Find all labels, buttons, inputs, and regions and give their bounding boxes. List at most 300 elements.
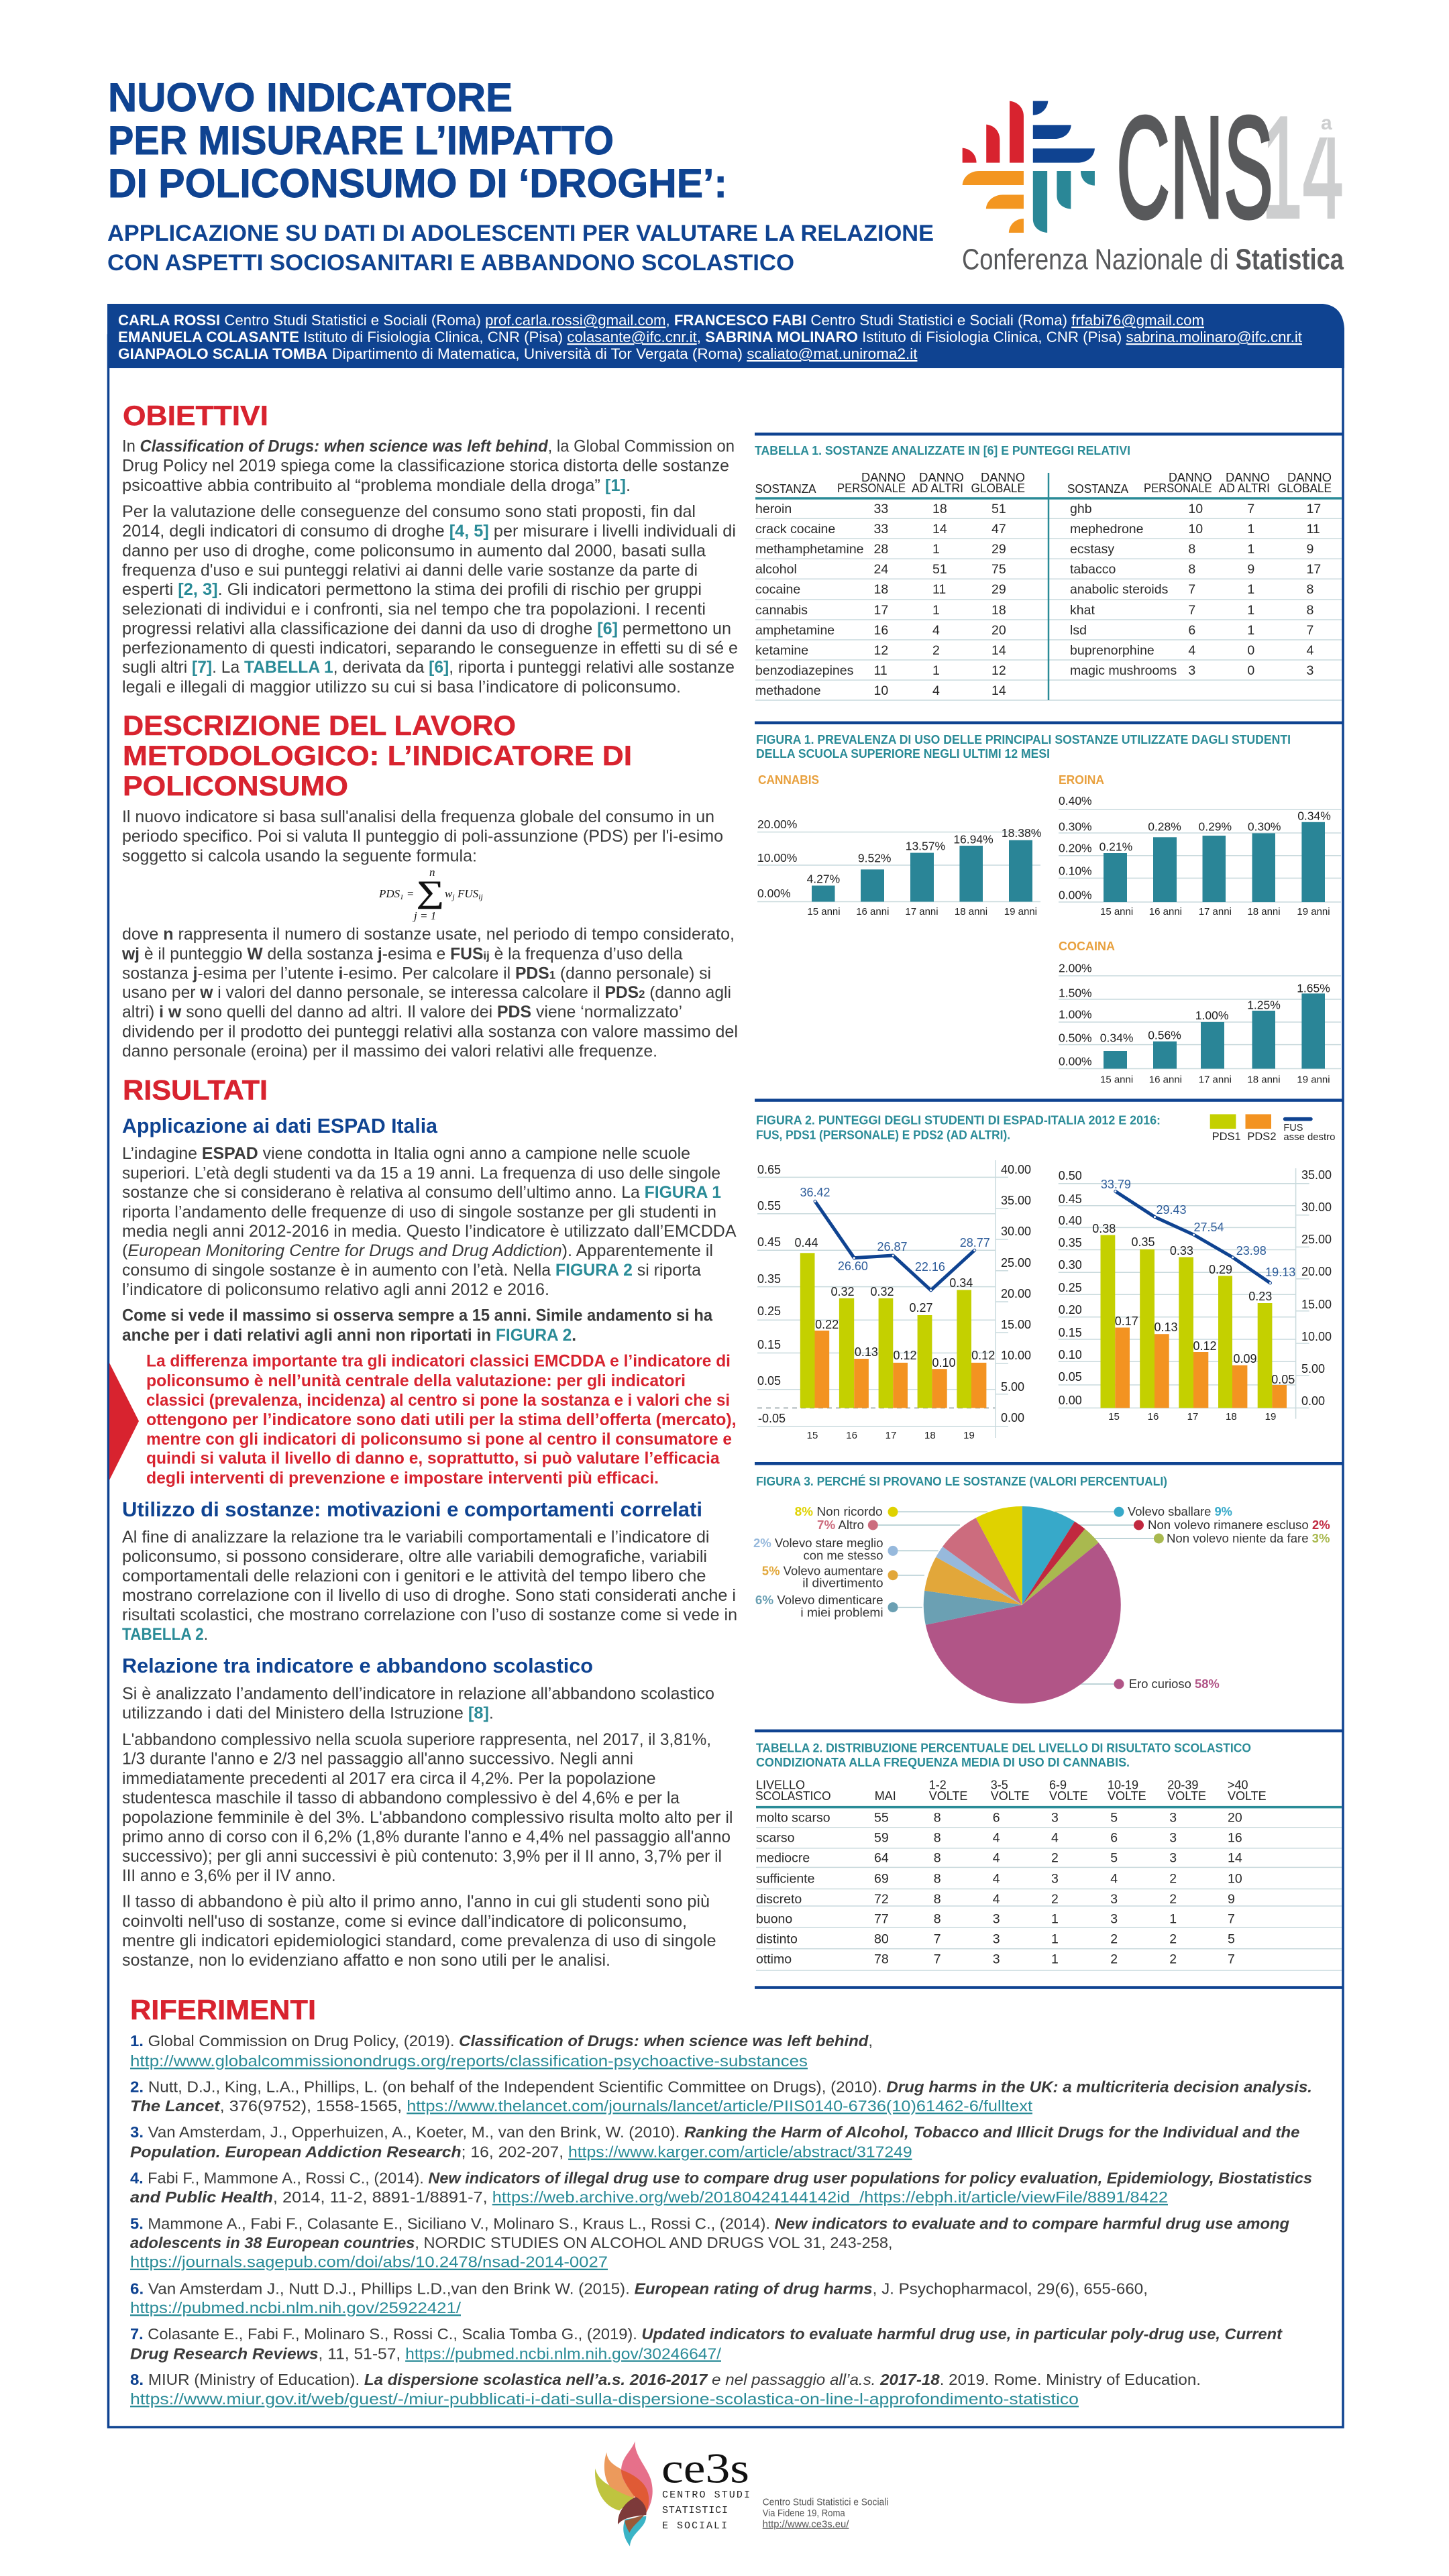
combo chart: 2016: 0.00 <box>1059 1394 1082 1407</box>
table: sostanze e punteggi: 11 <box>873 663 888 678</box>
reference list: Drug Research Reviews , 11, 51-57, https://pubmed.ncbi.nlm.nih.gov/30246647/ <box>130 2345 721 2362</box>
table: risultato scolastico: 6 <box>993 1810 1000 1825</box>
table: risultato scolastico: 3 <box>993 1931 1000 1946</box>
table: risultato scolastico: 1 <box>1051 1911 1059 1926</box>
table: risultato scolastico: 2 <box>1169 1892 1177 1907</box>
table: sostanze e punteggi: 12 <box>991 663 1006 678</box>
table: sostanze e punteggi: cocaine <box>755 582 800 597</box>
heading: tabella 2: CONDIZIONATA ALLA FREQUENZA MEDIA DI USO DI CANNABIS. <box>756 1755 1130 1769</box>
reference list: https://journals.sagepub.com/doi/abs/10.2478/nsad-2014-0027 <box>130 2253 608 2271</box>
text block: obiettivi: selezionati di individui e i confronti, sia nel tempo che tra popolazioni. I recenti <box>122 600 706 618</box>
combo chart: 2012: 0.45 <box>757 1235 781 1249</box>
table: sostanze e punteggi: 20 <box>991 623 1006 638</box>
table: sostanze e punteggi: DANNO <box>981 471 1025 484</box>
combo chart: 2016: 19 <box>1265 1411 1276 1422</box>
table: sostanze e punteggi: 29 <box>991 582 1006 597</box>
table: sostanze e punteggi: 24 <box>873 562 888 577</box>
arrow: red callout marker <box>109 1363 139 1480</box>
table: sostanze e punteggi: heroin <box>755 502 792 516</box>
bar chart: eroina: 0.29% <box>1198 820 1232 833</box>
bar chart: cocaina: 16 anni <box>1149 1074 1182 1086</box>
bar chart: eroina: 0.20% <box>1059 841 1092 854</box>
table: sostanze e punteggi: 29 <box>991 542 1006 557</box>
pie labels: 7% Altro <box>817 1518 864 1532</box>
combo chart: 2016: 0.13 <box>1154 1321 1178 1334</box>
bar chart: cocaina: 1.65% <box>1297 982 1330 995</box>
bar chart: eroina <box>1059 773 1341 917</box>
combo chart: 2016: 0.00 <box>1301 1394 1325 1408</box>
heading: figura 1: FIGURA 1. PREVALENZA DI USO DELLE PRINCIPALI SOSTANZE UTILIZZATE DAGLI STUDENTI <box>756 732 1291 746</box>
text block: obiettivi: In Classification of Drugs: when science was left behind, la Global Commission on <box>122 437 735 456</box>
reference list: 4. Fabi F., Mammone A., Rossi C., (2014). New indicators of illegal drug use to compare drug user populations for policy evaluation, Epidemiology, Biostatistics <box>130 2169 1312 2186</box>
table: sostanze e punteggi: 2 <box>932 643 940 658</box>
table: risultato scolastico: 14 <box>1228 1851 1242 1866</box>
formula: j <box>451 892 455 901</box>
table: risultato scolastico: 6-9 <box>1049 1779 1067 1792</box>
bar chart: cocaina: 0.56% <box>1148 1029 1181 1042</box>
bar chart: cannabis: 19 anni <box>1004 906 1037 917</box>
text block: abbandono scolastico: utilizzando i dati del Ministero della Istruzione [8]. <box>122 1704 494 1723</box>
combo chart: 2012: 0.32 <box>870 1285 894 1298</box>
table: risultato scolastico: 69 <box>874 1872 889 1887</box>
reference list: https://pubmed.ncbi.nlm.nih.gov/25922421/ <box>130 2299 462 2316</box>
table: risultato scolastico: 78 <box>874 1952 889 1967</box>
pie labels: Non volevo rimanere escluso 2% <box>1148 1518 1330 1532</box>
text block: metodo intro: Il nuovo indicatore si basa sull'analisi della frequenza globale del consumo in un <box>122 807 714 826</box>
table: risultato scolastico: 3 <box>1169 1831 1177 1846</box>
table: sostanze e punteggi: DANNO <box>1169 471 1212 484</box>
text block: abbandono scolastico: successivo); per gli anni successivi è più contenuto: 3,9% per il II anno, 3,7% per il <box>122 1847 722 1866</box>
text block: metodo spiegazione: usano per w i valori del danno personale, se interessa calcolare il PDS2 (danno agli <box>122 983 731 1002</box>
table: sostanze e punteggi: buprenorphine <box>1070 643 1155 658</box>
combo chart: 2016: 35.00 <box>1301 1168 1332 1182</box>
bar chart: eroina: 0.34% <box>1297 809 1331 822</box>
table: sostanze e punteggi: anabolic steroids <box>1070 582 1169 597</box>
heading: tabella 1: TABELLA 1. SOSTANZE ANALIZZATE IN [6] E PUNTEGGI RELATIVI <box>755 443 1130 457</box>
table: sostanze e punteggi: 6 <box>1188 623 1195 638</box>
table: sostanze e punteggi: 11 <box>932 582 946 597</box>
table: risultato scolastico: 8 <box>934 1851 941 1866</box>
heading: descrizione <box>123 710 632 801</box>
heading: figura 1 <box>756 732 1291 761</box>
combo chart: 2012: 35.00 <box>1001 1194 1031 1207</box>
table: sostanze e punteggi: 28 <box>873 542 888 557</box>
panel: figura 1 <box>755 722 1343 1086</box>
table: sostanze e punteggi: 1 <box>1247 603 1254 618</box>
table: risultato scolastico: VOLTE <box>991 1789 1029 1803</box>
logo: CNS 14 Conferenza Nazionale di Statistica: CNS <box>1116 86 1273 248</box>
table: sostanze e punteggi: 1 <box>1247 522 1254 537</box>
reference list <box>130 2032 1312 2408</box>
text block: abbandono scolastico: L'abbandono complessivo nella scuola superiore rappresenta, nel 2017, il 3,81%, <box>122 1730 711 1749</box>
bar chart: cocaina: 0.50% <box>1059 1031 1092 1045</box>
text block: abbandono scolastico: 1/3 durante l'anno e 2/3 nel passaggio all'anno successivo. Negli anni <box>122 1750 633 1769</box>
reference list: adolescents in 38 European countries, NORDIC STUDIES ON ALCOHOL AND DRUGS VOL 31, 243-258, <box>130 2234 892 2251</box>
combo chart: 2016: 15 <box>1108 1411 1120 1422</box>
logo: CNS 14 Conferenza Nazionale di Statistica <box>962 86 1346 276</box>
combo chart: 2012: 22.16 <box>915 1260 945 1274</box>
combo chart: 2016: 0.50 <box>1059 1169 1082 1182</box>
table: sostanze e punteggi: 9 <box>1307 542 1313 557</box>
combo chart: 2012: 36.42 <box>800 1186 830 1199</box>
text block: utilizzo <box>122 1528 737 1644</box>
bar chart: eroina: EROINA <box>1059 773 1104 787</box>
text block: ce3s address: Via Fidene 19, Roma <box>763 2508 846 2519</box>
table: risultato scolastico: 2 <box>1110 1952 1118 1967</box>
panel: obiettivi <box>122 400 738 696</box>
pie labels: 5% Volevo aumentare <box>762 1565 883 1578</box>
text block: utilizzo: risultati scolastici, che mostrano correlazione con l’uso di sostanze come si vede in <box>122 1606 737 1624</box>
combo chart: 2016: 0.05 <box>1059 1370 1082 1384</box>
heading: descrizione: DESCRIZIONE DEL LAVORO <box>123 710 516 741</box>
bar chart: cannabis: CANNABIS <box>758 773 819 787</box>
table: sostanze e punteggi: PERSONALE <box>837 482 906 495</box>
bar chart: eroina: 18 anni <box>1247 906 1281 917</box>
table: risultato scolastico: 59 <box>874 1831 889 1846</box>
bar chart: cocaina: 15 anni <box>1100 1074 1133 1086</box>
table: risultato scolastico: 4 <box>1051 1831 1059 1846</box>
bar chart: eroina: 0.30% <box>1059 820 1092 833</box>
text block: abbandono scolastico: popolazione femminile è del 3%. L'abbandono complessivo risulta molto alto per il <box>122 1808 733 1827</box>
bar chart: eroina: 0.00% <box>1059 888 1092 901</box>
table: sostanze e punteggi: methamphetamine <box>755 542 864 557</box>
heading: figura 2 <box>756 1113 1161 1141</box>
table: sostanze e punteggi: 4 <box>1307 643 1313 658</box>
author band: EMANUELA COLASANTE Istituto di Fisiologia Clinica, CNR (Pisa) colasante@ifc.cnr.it, SABRINA MOLINARO Istituto di Fisiologia Clinica, CNR (Pisa) sabrina.molinaro@ifc.cnr.it <box>118 329 1302 345</box>
combo chart: 2012: 0.34 <box>949 1276 973 1290</box>
table: risultato scolastico: 1 <box>1051 1952 1059 1967</box>
table: sostanze e punteggi: 8 <box>1307 582 1313 597</box>
table: risultato scolastico: 1 <box>1051 1931 1059 1946</box>
combo chart: 2012: 0.27 <box>909 1301 933 1314</box>
table: sostanze e punteggi: 1 <box>1247 542 1254 557</box>
callout: differenza tra indicatori: classici (prevalenza, incidenza) al centro si pone la sostanza e i valori che si <box>146 1391 730 1410</box>
text block: obiettivi: frequenza d'uso e sui punteggi relativi ai danni delle varie sostanze da parte di <box>122 561 698 580</box>
table: sostanze e punteggi: 8 <box>1188 542 1195 557</box>
bar chart: cocaina: COCAINA <box>1059 939 1115 953</box>
reference list: 5. Mammone A., Fabi F., Colasante E., Siciliano V., Molinaro S., Kraus L., Rossi C., (2014). New indicators to evaluate and to compare harmful drug use among <box>130 2215 1289 2232</box>
reference list: https://www.miur.gov.it/web/guest/-/miur-pubblicati-i-dati-sulla-dispersione-scolastica-on-line-l-approfondimento-statistico <box>130 2390 1079 2408</box>
table: sostanze e punteggi: DANNO <box>919 471 964 484</box>
combo chart: 2016: 0.15 <box>1059 1326 1082 1339</box>
table: risultato scolastico: VOLTE <box>1228 1789 1267 1803</box>
table: risultato scolastico: 5 <box>1228 1931 1235 1946</box>
text block: abbandono scolastico: sostanze, non lo evidenziano affatto e non sono utili per le analisi. <box>122 1951 610 1970</box>
combo chart: 2016: 0.25 <box>1059 1281 1082 1294</box>
text block: abbandono scolastico: Il tasso di abbandono è più alto il primo anno, l'anno in cui gli studenti sono più <box>122 1893 710 1911</box>
formula: 1 <box>400 893 404 901</box>
combo chart: 2016: 0.09 <box>1233 1352 1257 1365</box>
title <box>108 75 727 206</box>
table: sostanze e punteggi: 12 <box>873 643 888 658</box>
pie chart <box>924 1506 1121 1703</box>
logo: CNS 14 Conferenza Nazionale di Statistica: Conferenza Nazionale di Statistica <box>962 243 1344 276</box>
text block: utilizzo: Al fine di analizzare la relazione tra le variabili comportamentali e l’indicatore di <box>122 1528 710 1547</box>
text block: abbandono scolastico: primo anno di corso con il 6,2% (1,8% durante l'anno e 4,4% nel passaggio all'anno <box>122 1828 731 1846</box>
table: risultato scolastico: distinto <box>756 1931 798 1946</box>
table: sostanze e punteggi: DANNO <box>1226 471 1270 484</box>
text block: obiettivi: 2014, degli indicatori di consumo di droghe [4, 5] per misurare i livelli individuali di <box>122 522 736 541</box>
text block: obiettivi: perfezionamento di questi indicatori, separando le conseguenze in effetti su di sé e <box>122 639 738 658</box>
bar chart: eroina: 16 anni <box>1149 906 1182 917</box>
table: risultato scolastico: 20-39 <box>1167 1779 1198 1792</box>
text block: metodo spiegazione: dividendo per il prodotto dei punteggi relativi alla sostanza con valore massimo del <box>122 1022 738 1041</box>
table: sostanze e punteggi: SOSTANZA <box>1067 482 1128 496</box>
text block: abbandono scolastico: studentesca maschile il tasso di abbandono complessivo è del 4,6% e per la <box>122 1789 680 1807</box>
bar chart: cannabis: 15 anni <box>807 906 841 917</box>
text block: metodo spiegazione: dove n rappresenta il numero di sostanze usate, nel periodo di tempo considerato, <box>122 925 735 944</box>
heading: figura 2: FUS, PDS1 (PERSONALE) E PDS2 (AD ALTRI). <box>756 1128 1010 1141</box>
pie labels: Ero curioso 58% <box>1129 1677 1220 1691</box>
combo chart: 2012: 0.65 <box>757 1163 781 1176</box>
text block: obiettivi: danno per uso di droghe, come policonsumo in aumento dal 2000, basati sulla <box>122 541 706 560</box>
table: sostanze e punteggi: methadone <box>755 683 821 698</box>
table: sostanze e punteggi: 18 <box>932 502 947 516</box>
formula: ij <box>478 892 483 901</box>
combo chart: 2012: 18 <box>924 1430 936 1441</box>
table: risultato scolastico: scarso <box>756 1831 795 1846</box>
table: risultato scolastico: 8 <box>934 1911 941 1926</box>
author band: CARLA ROSSI Centro Studi Statistici e Sociali (Roma) prof.carla.rossi@gmail.com, FRANCESCO FABI Centro Studi Statistici e Sociali (Roma) frfabi76@gmail.com <box>118 312 1204 329</box>
table: sostanze e punteggi: tabacco <box>1070 562 1116 577</box>
table: risultato scolastico: molto scarso <box>756 1810 830 1825</box>
combo chart: 2016: 0.38 <box>1092 1222 1116 1235</box>
table: sostanze e punteggi: 4 <box>1188 643 1195 658</box>
text block: abbandono scolastico: III anno e 3,6% per il IV anno. <box>122 1866 336 1885</box>
table: risultato scolastico: 3 <box>1051 1872 1059 1887</box>
subheading: relazione: Relazione tra indicatore e abbandono scolastico <box>122 1654 593 1677</box>
author band: GIANPAOLO SCALIA TOMBA Dipartimento di Matematica, Università di Tor Vergata (Roma) scaliato@mat.uniroma2.it <box>118 345 917 362</box>
table: sostanze e punteggi: 9 <box>1247 562 1254 577</box>
combo chart: 2016: 0.20 <box>1059 1303 1082 1317</box>
pie labels: 6% Volevo dimenticare <box>755 1593 883 1607</box>
text block: obiettivi: psicoattive abbia contribuito al “problema mondiale della droga” [1]. <box>122 476 631 495</box>
table: risultato scolastico: 2 <box>1051 1892 1059 1907</box>
text block: espad: (European Monitoring Centre for Drugs and Drug Addiction). Apparentemente il <box>122 1241 713 1260</box>
reference list: 1. Global Commission on Drug Policy, (2019). Classification of Drugs: when science was left behind , <box>130 2032 873 2050</box>
text block: abbandono scolastico: Si è analizzato l’andamento dell’indicatore in relazione all’abbandono scolastico <box>122 1685 714 1703</box>
table: risultato scolastico: 64 <box>874 1851 889 1866</box>
combo chart: 2012: 0.10 <box>932 1356 956 1369</box>
combo chart: 2012: 16 <box>846 1430 857 1441</box>
bar chart: eroina: 17 anni <box>1199 906 1232 917</box>
table: risultato scolastico: 7 <box>1228 1952 1235 1967</box>
table: sostanze e punteggi: 8 <box>1188 562 1195 577</box>
table: sostanze e punteggi: 17 <box>1307 562 1321 577</box>
heading: risultati: RISULTATI <box>123 1074 268 1105</box>
combo chart: 2016: 20.00 <box>1301 1265 1332 1278</box>
combo chart: 2016: 0.29 <box>1209 1263 1232 1276</box>
text block: metodo spiegazione: danno personale (eroina) per il massimo dei valori relativi alle frequenze. <box>122 1042 657 1061</box>
text block: espad <box>122 1144 737 1299</box>
table: risultato scolastico: ottimo <box>756 1952 792 1967</box>
table: sostanze e punteggi: 1 <box>1247 623 1254 638</box>
reference list: 7. Colasante E., Fabi F., Molinaro S., Rossi C., Scalia Tomba G., (2019). Updated indicators to evaluate harmful drug use, in particular poly-drug use, Current <box>130 2325 1283 2343</box>
text block: espad: media negli anni 2012-2016 in media. Questo l’indicatore è utilizzato dall’EMCDDA <box>122 1222 737 1241</box>
legend: FUS <box>1283 1123 1303 1133</box>
text block: abbandono scolastico: coinvolti nell'uso di sostanze, come si evince dall’indicatore di policonsumo, <box>122 1912 687 1931</box>
text block: obiettivi: Drug Policy nel 2019 spiega come la classificazione storica distorta delle sostanze <box>122 457 729 475</box>
table: risultato scolastico: 3 <box>1110 1911 1118 1926</box>
table: sostanze e punteggi: 8 <box>1307 603 1313 618</box>
combo chart: 2012: 0.12 <box>893 1349 917 1362</box>
table: risultato scolastico: 2 <box>1169 1931 1177 1946</box>
table: sostanze e punteggi: 16 <box>873 623 888 638</box>
bar chart: cocaina: 1.00% <box>1059 1007 1092 1021</box>
table: risultato scolastico: VOLTE <box>1049 1789 1088 1803</box>
combo chart: 2016: 25.00 <box>1301 1233 1332 1246</box>
table: risultato scolastico: 2 <box>1169 1872 1177 1887</box>
callout: differenza tra indicatori <box>146 1352 737 1488</box>
text block: espad: consumo di singole sostanze è in aumento con l’età. Nella FIGURA 2 si riporta <box>122 1261 701 1280</box>
combo chart: 2012: 0.05 <box>757 1374 781 1388</box>
bar chart: cocaina: 0.34% <box>1100 1031 1133 1045</box>
table: sostanze e punteggi: GLOBALE <box>971 482 1025 495</box>
bar chart: cannabis: 20.00% <box>757 818 797 831</box>
combo chart: 2012: 0.55 <box>757 1199 781 1213</box>
table: risultato scolastico: 7 <box>1228 1911 1235 1926</box>
subheading: utilizzo: Utilizzo di sostanze: motivazioni e comportamenti correlati <box>122 1498 702 1521</box>
combo chart: 2016: 0.35 <box>1059 1236 1082 1249</box>
table: sostanze e punteggi: 0 <box>1247 663 1254 678</box>
combo chart: 2012: 0.15 <box>757 1338 781 1351</box>
text block: utilizzo: TABELLA 2. <box>122 1625 208 1644</box>
callout: differenza tra indicatori: policonsumo è nell’unità centrale della valutazione: per gli indicatori <box>146 1371 686 1390</box>
combo chart: 2012: 0.00 <box>1001 1411 1024 1424</box>
table: risultato scolastico: 3 <box>1169 1810 1177 1825</box>
reference list: Population. European Addiction Research ; 16, 202-207, https://www.karger.com/article/abstract/317249 <box>130 2143 912 2161</box>
table: risultato scolastico: 1-2 <box>929 1779 947 1792</box>
title: NUOVO INDICATORE <box>108 75 513 120</box>
combo chart: 2012: 26.60 <box>838 1259 868 1273</box>
heading: figura 1: DELLA SCUOLA SUPERIORE NEGLI ULTIMI 12 MESI <box>756 746 1050 761</box>
table: sostanze e punteggi: amphetamine <box>755 623 835 638</box>
combo chart: 2012: 19 <box>963 1430 975 1441</box>
combo chart: 2016: 19.13 <box>1265 1266 1295 1279</box>
pie labels: il divertimento <box>802 1576 883 1589</box>
combo chart: 2016: 23.98 <box>1236 1244 1267 1257</box>
table: sostanze e punteggi: 14 <box>991 683 1006 698</box>
table: sostanze e punteggi: ecstasy <box>1070 542 1114 557</box>
text block: massimo a 15 anni: Come si vede il massimo si osserva sempre a 15 anni. Simile andamento si ha <box>122 1306 713 1325</box>
table: sostanze e punteggi <box>755 471 1342 700</box>
table: risultato scolastico: 5 <box>1110 1851 1118 1866</box>
logo: ce3s footer: ce3s <box>661 2445 749 2492</box>
table: risultato scolastico: 3 <box>1110 1892 1118 1907</box>
formula: PDS <box>379 887 400 900</box>
combo chart: 2012: 28.77 <box>960 1236 990 1249</box>
text block: obiettivi: esperti [2, 3]. Gli indicatori permettono la stima dei profili di rischio per gruppi <box>122 580 702 599</box>
combo chart: 2012: 15.00 <box>1001 1318 1031 1331</box>
table: sostanze e punteggi: 51 <box>932 562 947 577</box>
logo: ce3s footer: E SOCIALI <box>662 2520 727 2532</box>
heading: tabella 2 <box>756 1740 1251 1769</box>
text block: abbandono scolastico: mentre gli indicatori epidemiologici standard, come prevalenza di uso di singole <box>122 1931 716 1950</box>
text block: ce3s address <box>763 2498 888 2530</box>
table: sostanze e punteggi: 14 <box>991 643 1006 658</box>
table: risultato scolastico: 4 <box>1110 1872 1118 1887</box>
table: risultato scolastico: 4 <box>993 1892 1000 1907</box>
table: risultato scolastico: buono <box>756 1911 792 1926</box>
logo: CNS 14 Conferenza Nazionale di Statistica: 14 <box>1262 86 1344 248</box>
callout: differenza tra indicatori: quindi si valuta il livello di danno e, soprattutto, si può valutare l’efficacia <box>146 1449 720 1468</box>
bar chart: cocaina: 1.25% <box>1247 998 1281 1011</box>
panel: figura 2 <box>755 1099 1343 1441</box>
table: sostanze e punteggi: 0 <box>1247 643 1254 658</box>
formula <box>378 866 483 922</box>
table: risultato scolastico: 3 <box>993 1911 1000 1926</box>
table: sostanze e punteggi: 3 <box>1307 663 1313 678</box>
bar chart: cannabis: 16 anni <box>856 906 889 917</box>
combo chart: 2012: 5.00 <box>1001 1380 1024 1394</box>
table: sostanze e punteggi: 10 <box>1188 522 1203 537</box>
heading: obiettivi: OBIETTIVI <box>123 400 268 431</box>
text block: metodo intro: periodo specifico. Poi si valuta Il punteggio di poli-assunzione (PDS) per l'i-esimo <box>122 827 723 846</box>
table: sostanze e punteggi: 17 <box>1307 502 1321 516</box>
text block: espad: L’indagine ESPAD viene condotta in Italia ogni anno a campione nelle scuole <box>122 1144 690 1163</box>
table: sostanze e punteggi: 3 <box>1188 663 1195 678</box>
subtitle <box>107 221 934 276</box>
combo chart: 2016: 15.00 <box>1301 1298 1332 1311</box>
table: sostanze e punteggi: DANNO <box>861 471 906 484</box>
table: sostanze e punteggi: AD ALTRI <box>1219 482 1270 495</box>
pie labels: i miei problemi <box>800 1606 883 1619</box>
table: sostanze e punteggi: 1 <box>932 663 940 678</box>
callout: differenza tra indicatori: La differenza importante tra gli indicatori classici EMCDDA e l’indicatore di <box>146 1352 731 1371</box>
table: sostanze e punteggi: 1 <box>932 542 940 557</box>
bar chart: cannabis: 9.52% <box>858 852 892 865</box>
title: DI POLICONSUMO DI ‘DROGHE’: <box>108 161 727 206</box>
table: risultato scolastico: MAI <box>875 1789 896 1803</box>
table: sostanze e punteggi: PERSONALE <box>1144 482 1212 495</box>
bar chart: cocaina: 19 anni <box>1297 1074 1330 1086</box>
table: risultato scolastico <box>755 1779 1342 1970</box>
bar chart: cocaina: 2.00% <box>1059 962 1092 975</box>
bar chart: eroina: 15 anni <box>1100 906 1133 917</box>
table: risultato scolastico: 10-19 <box>1108 1779 1138 1792</box>
table: risultato scolastico: 2 <box>1169 1952 1177 1967</box>
table: sostanze e punteggi: magic mushrooms <box>1070 663 1177 678</box>
combo chart: 2016: 5.00 <box>1301 1362 1325 1376</box>
bar chart: cannabis: 16.94% <box>953 833 994 846</box>
combo chart: 2016: 16 <box>1148 1411 1159 1422</box>
callout: differenza tra indicatori: ottengono per l’indicatore sono dati utili per la stima dell’offerta (mercato), <box>146 1410 737 1429</box>
table: sostanze e punteggi: SOSTANZA <box>755 482 816 496</box>
bar chart: cannabis: 17 anni <box>905 906 938 917</box>
bar chart: cannabis: 10.00% <box>757 851 797 864</box>
table: risultato scolastico: 7 <box>934 1931 941 1946</box>
combo chart: 2016: 29.43 <box>1156 1203 1187 1217</box>
combo chart: 2012: 30.00 <box>1001 1225 1031 1238</box>
text block: massimo a 15 anni <box>122 1306 713 1345</box>
text block: utilizzo: policonsumo, si possono considerare, oltre alle variabili demografiche, variabili <box>122 1547 707 1566</box>
heading: figura 3: FIGURA 3. PERCHÉ SI PROVANO LE SOSTANZE (VALORI PERCENTUALI) <box>756 1474 1167 1488</box>
text block: abbandono scolastico: immediatamente precedenti al 2017 era circa il 4,2%. Per la popolazione <box>122 1769 656 1788</box>
bar chart: eroina: 0.10% <box>1059 864 1092 877</box>
bar chart: eroina: 0.28% <box>1148 820 1181 833</box>
text block: obiettivi: progressi relativi alla classificazione dei danni da uso di droghe [6] permettono un <box>122 620 731 638</box>
table: risultato scolastico: 77 <box>874 1911 889 1926</box>
bar chart: eroina: 0.40% <box>1059 794 1092 807</box>
table: sostanze e punteggi: 75 <box>991 562 1006 577</box>
subtitle: APPLICAZIONE SU DATI DI ADOLESCENTI PER VALUTARE LA RELAZIONE <box>107 221 934 246</box>
table: sostanze e punteggi: 7 <box>1307 623 1313 638</box>
bar chart: cocaina: 1.00% <box>1195 1009 1228 1022</box>
table: sostanze e punteggi: alcohol <box>755 562 797 577</box>
table: sostanze e punteggi: ghb <box>1070 502 1092 516</box>
pie labels: 8% Non ricordo <box>795 1505 883 1518</box>
table: sostanze e punteggi: AD ALTRI <box>912 482 963 495</box>
